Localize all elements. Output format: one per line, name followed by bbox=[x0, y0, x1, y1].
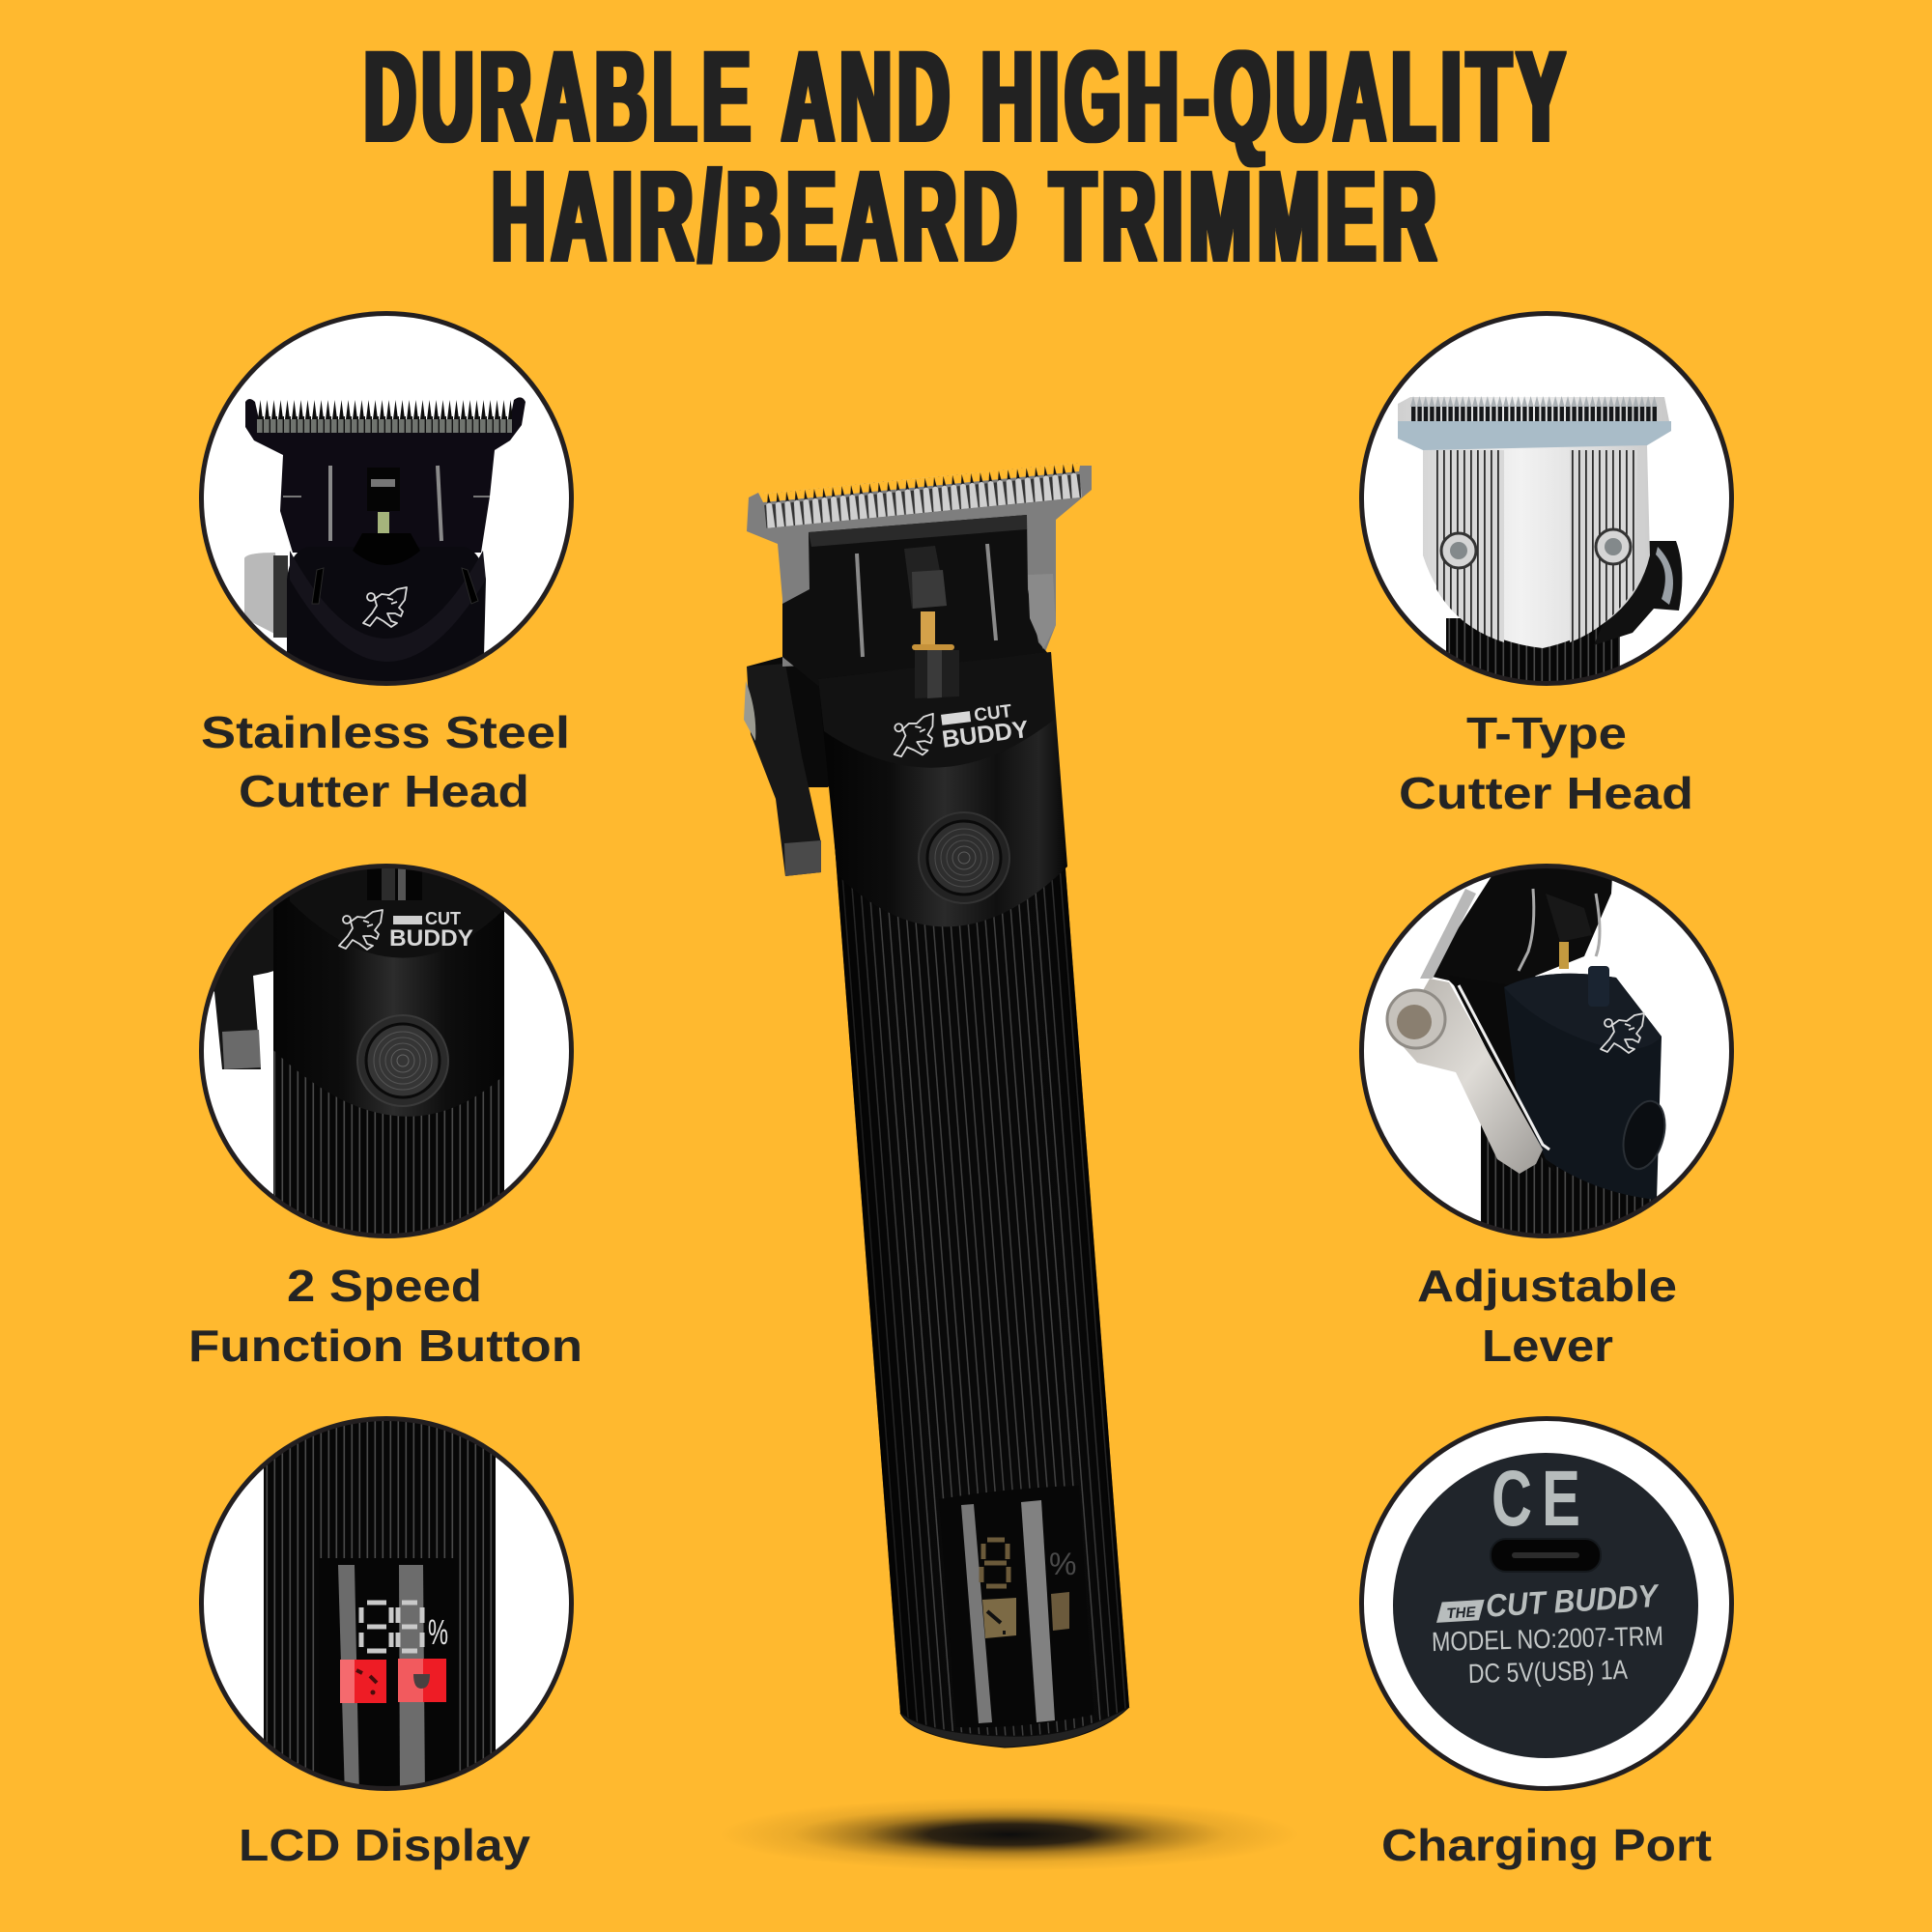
ribbed body bbox=[264, 1410, 496, 1797]
black frame behind the blade bbox=[1434, 868, 1612, 985]
panel: LCD display: % bbox=[428, 1612, 448, 1652]
panel: 2 speed function button bbox=[193, 850, 572, 1256]
knob bbox=[1594, 541, 1682, 645]
cat logo bbox=[363, 587, 407, 627]
display window bbox=[321, 1558, 454, 1786]
panel: t-type cutter head bbox=[1362, 313, 1731, 696]
brand logo: BUDDY bbox=[941, 716, 1031, 753]
lever steel bbox=[244, 553, 276, 634]
label: LCD Display bbox=[239, 1820, 530, 1870]
CE mark: C bbox=[1492, 1455, 1532, 1543]
blade bbox=[1398, 397, 1671, 648]
label: T-Type bbox=[1466, 708, 1627, 758]
blade plate bbox=[747, 466, 1092, 667]
blade teeth bbox=[763, 463, 1082, 528]
label: Adjustable bbox=[1417, 1261, 1677, 1311]
CE mark bbox=[1493, 1470, 1578, 1526]
body bbox=[1446, 618, 1620, 681]
blade mount block bbox=[782, 515, 1056, 686]
brand: CUT BUDDY bbox=[1485, 1577, 1662, 1624]
panel: charging port bbox=[1362, 1418, 1731, 1789]
black cap body bbox=[1504, 974, 1662, 1200]
logo bbox=[339, 909, 473, 952]
rating text: DC 5V(USB) 1A bbox=[1468, 1655, 1629, 1689]
lever bbox=[214, 908, 273, 1069]
brand logo: CUT bbox=[973, 701, 1013, 726]
ribbed body bbox=[830, 821, 1137, 1764]
CE mark: E bbox=[1542, 1455, 1580, 1543]
silver lever bbox=[1396, 979, 1543, 1174]
red indicators bbox=[355, 1660, 386, 1703]
label: Lever bbox=[1482, 1321, 1613, 1371]
ribbed section bbox=[273, 1050, 504, 1234]
panel: adjustable lever bbox=[1362, 860, 1731, 1256]
collar bbox=[273, 896, 504, 1117]
smooth head collar bbox=[818, 650, 1067, 926]
label: Cutter Head bbox=[239, 766, 529, 816]
base cap bbox=[900, 1707, 1129, 1747]
brand bbox=[1436, 1584, 1660, 1623]
teeth bbox=[257, 400, 512, 433]
button bbox=[357, 1015, 448, 1106]
screws bbox=[1441, 533, 1476, 568]
label: Stainless Steel bbox=[201, 707, 570, 757]
black frame beside the lever bbox=[1453, 985, 1551, 1169]
body bbox=[287, 553, 486, 681]
digits bbox=[361, 1603, 422, 1651]
brand: THE bbox=[1446, 1604, 1477, 1622]
floor shadow bbox=[720, 1798, 1299, 1871]
cat logo bbox=[1601, 1013, 1644, 1053]
LCD window bbox=[939, 1486, 1094, 1727]
panel: LCD display bbox=[201, 1410, 572, 1800]
USB-C port bbox=[1491, 1539, 1601, 1572]
button bbox=[1623, 1099, 1665, 1171]
model text: MODEL NO:2007-TRM bbox=[1432, 1621, 1663, 1657]
label: 2 Speed bbox=[287, 1261, 482, 1311]
main trimmer product bbox=[744, 463, 1137, 1764]
title bbox=[364, 25, 1571, 289]
LCD window: % bbox=[1049, 1547, 1076, 1581]
lever arm bbox=[744, 599, 842, 876]
panel: stainless steel cutter head bbox=[201, 313, 572, 696]
power button bbox=[919, 812, 1009, 903]
brand logo bbox=[890, 699, 1031, 759]
springs and block bbox=[328, 466, 332, 541]
label: Charging Port bbox=[1381, 1820, 1712, 1870]
label: Function Button bbox=[188, 1321, 582, 1371]
logo: CUT bbox=[425, 909, 461, 928]
ribbed plates bbox=[1436, 450, 1504, 642]
ribs bbox=[1481, 1124, 1654, 1234]
blade silhouette bbox=[245, 397, 526, 553]
logo: BUDDY bbox=[389, 925, 473, 952]
label: Cutter Head bbox=[1399, 768, 1693, 818]
